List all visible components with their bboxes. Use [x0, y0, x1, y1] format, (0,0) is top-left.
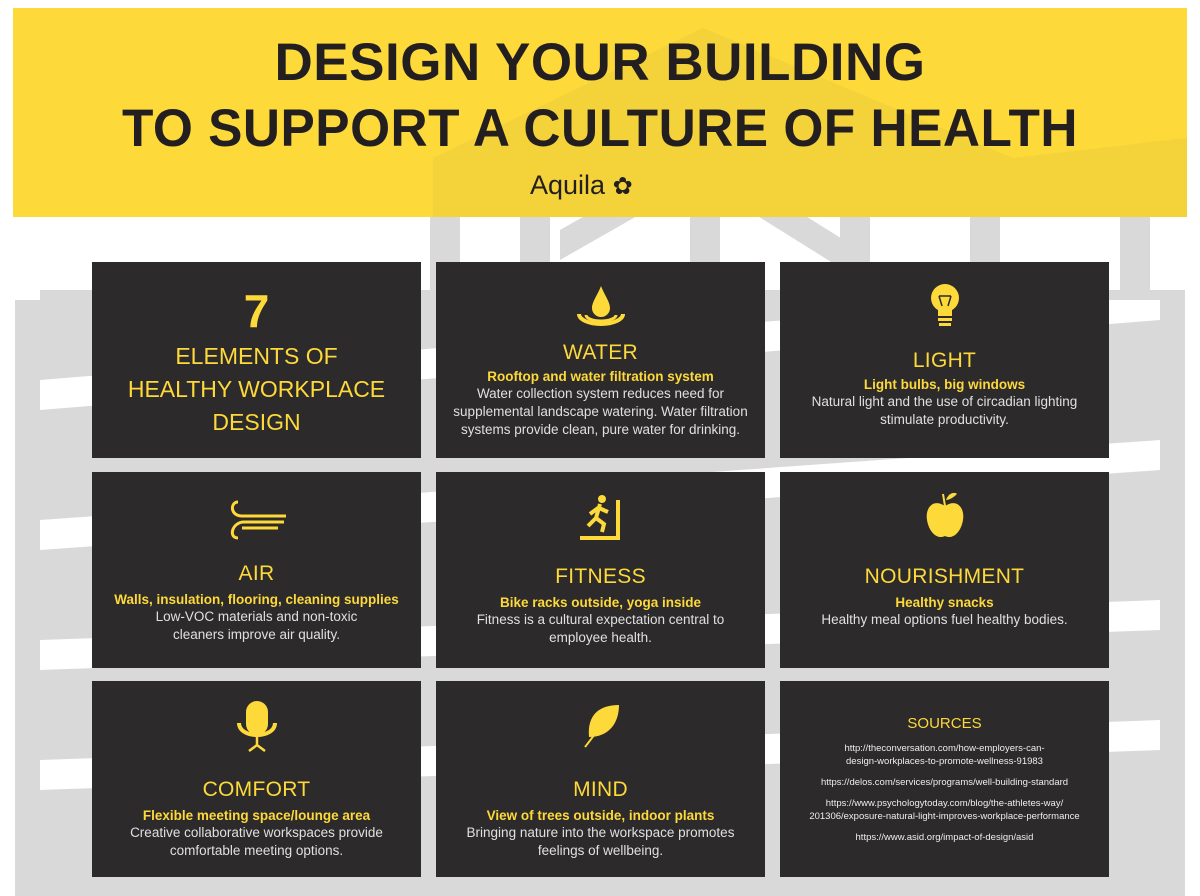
panel: comfort [92, 681, 421, 877]
panel: 7 elements [92, 262, 421, 458]
panel: sources: 201306/exposure-natural-light-improves-workplace-performance [809, 811, 1080, 822]
panel: nourishment: Healthy snacks [895, 595, 994, 610]
panel: comfort: Flexible meeting space/lounge area [143, 808, 370, 823]
panel: fitness: employee health. [549, 630, 652, 645]
panel: 7 elements: 7 [244, 285, 269, 337]
panel: air: Low-VOC materials and non-toxic [156, 609, 357, 624]
panel: water [436, 262, 765, 458]
panel: mind [436, 681, 765, 877]
panel: comfort: Creative collaborative workspaces provide [130, 825, 383, 840]
title: TO SUPPORT A CULTURE OF HEALTH [122, 99, 1078, 158]
panel: sources [780, 681, 1109, 877]
panel: light: LIGHT [913, 349, 976, 372]
panel: fitness [436, 472, 765, 668]
panel: water: systems provide clean, pure water for drinking. [461, 422, 740, 437]
panel: nourishment: NOURISHMENT [865, 565, 1024, 588]
panel: nourishment: Healthy meal options fuel healthy bodies. [821, 612, 1068, 627]
panel: sources: http://theconversation.com/how-employers-can- [844, 743, 1045, 754]
panel: air: AIR [239, 562, 274, 585]
panel: air [92, 472, 421, 668]
icon: apple [926, 492, 964, 537]
icon: treadmill runner [580, 495, 620, 540]
panel: 7 elements: ELEMENTS OF [175, 343, 338, 369]
panel: fitness: Bike racks outside, yoga inside [500, 595, 701, 610]
panel: sources: https://www.asid.org/impact-of-design/asid [856, 832, 1033, 843]
panel: sources: https://delos.com/services/programs/well-building-standard [821, 777, 1068, 788]
icon: chair [237, 701, 277, 752]
icon: leaf [584, 705, 619, 748]
icon: wind [230, 500, 286, 540]
icon: water drop [577, 286, 625, 326]
panel: light: Natural light and the use of circadian lighting [812, 394, 1077, 409]
panel: air: cleaners improve air quality. [173, 627, 340, 642]
panel: comfort: comfortable meeting options. [170, 843, 343, 858]
panel: sources: design-workplaces-to-promote-wellness-91983 [846, 756, 1043, 767]
panel: fitness: Fitness is a cultural expectation central to [477, 612, 724, 627]
logo: Aquila: Aquila ✿ [530, 170, 633, 200]
panel: 7 elements: HEALTHY WORKPLACE [128, 376, 385, 402]
panel: light [780, 262, 1109, 458]
icon: light bulb [931, 284, 959, 326]
panel: sources: https://www.psychologytoday.com/blog/the-athletes-way/ [826, 798, 1063, 809]
panel: mind: View of trees outside, indoor plants [487, 808, 714, 823]
panel: mind: Bringing nature into the workspace promotes [467, 825, 734, 840]
panel: 7 elements: DESIGN [212, 409, 301, 435]
panel: sources: SOURCES [907, 715, 982, 732]
panel: fitness: FITNESS [555, 565, 646, 588]
panel: mind: MIND [573, 778, 628, 801]
panel: light: stimulate productivity. [880, 412, 1009, 427]
panel: water: Rooftop and water filtration system [487, 369, 714, 384]
title: DESIGN YOUR BUILDING [275, 33, 925, 92]
panel: comfort: COMFORT [203, 778, 310, 801]
panel: mind: feelings of wellbeing. [538, 843, 663, 858]
panel: light: Light bulbs, big windows [864, 377, 1025, 392]
panel: nourishment [780, 472, 1109, 668]
panel: water: Water collection system reduces need for [477, 386, 724, 401]
panel: air: Walls, insulation, flooring, cleaning supplies [114, 592, 399, 607]
panel: water: supplemental landscape watering. Water filtration [453, 404, 748, 419]
panel: water: WATER [563, 341, 638, 364]
title banner [13, 8, 1187, 217]
title [122, 33, 1078, 200]
